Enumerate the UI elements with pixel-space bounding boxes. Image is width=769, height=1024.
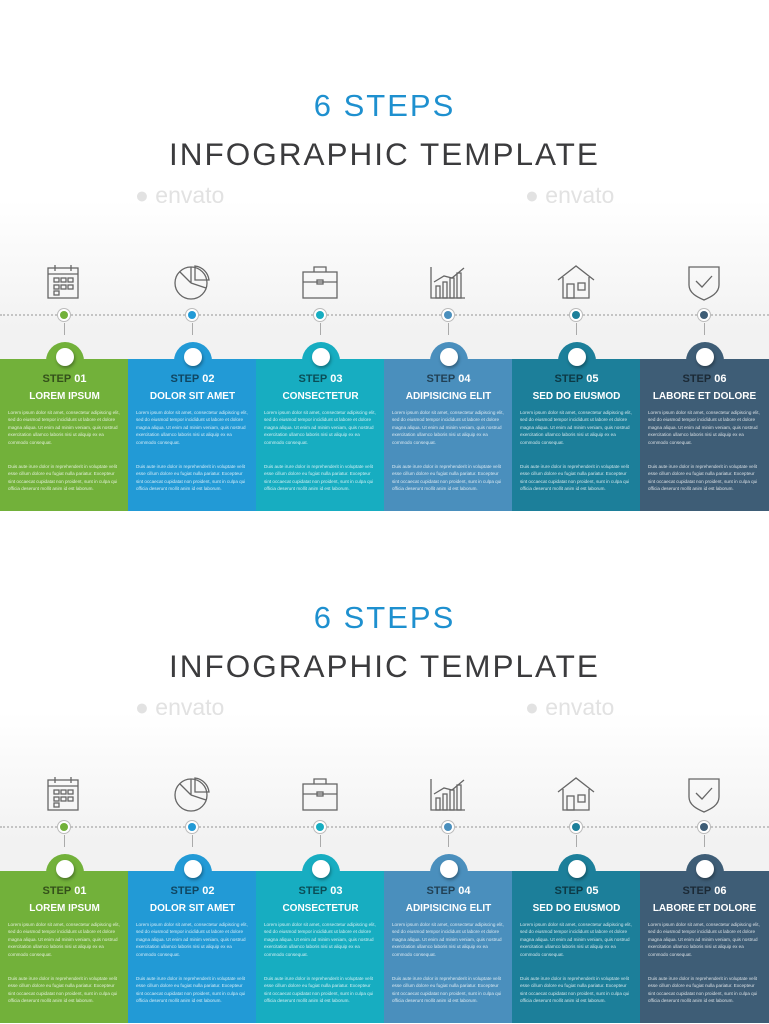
card: step 3: Duis aute irure dolor in reprehenderit in voluptate velit esse cillum dolore eu fugiat nulla pariatur. Excepteur sint occaecat cupidatat non proident, sunt in culpa qui officia deserunt mollit anim id est laborum.	[264, 976, 373, 1003]
card: step 4: STEP 04	[426, 885, 471, 897]
card: step 6: Lorem ipsum dolor sit amet, consectetur adipiscing elit, sed do eiusmod tempor incididunt ut labore et dolore magna aliqua. Ut enim ad minim veniam, quis nostrud exercitation ullamco laboris nisi ut aliquip ex ea commodo consequat.	[648, 922, 760, 957]
card: step 2	[128, 359, 257, 511]
card: step 1: Lorem ipsum dolor sit amet, consectetur adipiscing elit, sed do eiusmod tempor incididunt ut labore et dolore magna aliqua. Ut enim ad minim veniam, quis nostrud exercitation ullamco laboris nisi ut aliquip ex ea commodo consequat.	[8, 410, 120, 445]
watermark right: ● envato	[525, 694, 614, 720]
card: step 3: CONSECTETUR	[282, 903, 359, 914]
card: step 4: STEP 04	[426, 373, 471, 385]
node markers	[57, 308, 711, 335]
title: 6 STEPS	[314, 88, 455, 123]
card: step 5: Duis aute irure dolor in reprehenderit in voluptate velit esse cillum dolore eu fugiat nulla pariatur. Excepteur sint occaecat cupidatat non proident, sunt in culpa qui officia deserunt mollit anim id est laborum.	[520, 976, 629, 1003]
card: step 3: STEP 03	[298, 373, 343, 385]
card: step 3: CONSECTETUR	[282, 391, 359, 402]
card: step 3	[256, 871, 385, 1023]
card: step 2: STEP 02	[170, 885, 215, 897]
node markers	[57, 820, 711, 847]
card: step 1: Duis aute irure dolor in reprehenderit in voluptate velit esse cillum dolore eu fugiat nulla pariatur. Excepteur sint occaecat cupidatat non proident, sunt in culpa qui officia deserunt mollit anim id est laborum.	[8, 976, 117, 1003]
card: step 6: Duis aute irure dolor in reprehenderit in voluptate velit esse cillum dolore eu fugiat nulla pariatur. Excepteur sint occaecat cupidatat non proident, sunt in culpa qui officia deserunt mollit anim id est laborum.	[648, 976, 757, 1003]
card: step 2: Duis aute irure dolor in reprehenderit in voluptate velit esse cillum dolore eu fugiat nulla pariatur. Excepteur sint occaecat cupidatat non proident, sunt in culpa qui officia deserunt mollit anim id est laborum.	[136, 464, 245, 491]
card: step 2: Duis aute irure dolor in reprehenderit in voluptate velit esse cillum dolore eu fugiat nulla pariatur. Excepteur sint occaecat cupidatat non proident, sunt in culpa qui officia deserunt mollit anim id est laborum.	[136, 976, 245, 1003]
card: step 6: LABORE ET DOLORE	[653, 903, 756, 914]
subtitle: INFOGRAPHIC TEMPLATE	[169, 648, 600, 684]
icon: pie chart	[174, 265, 210, 300]
card: step 5: SED DO EIUSMOD	[533, 391, 620, 402]
card: step 4	[384, 359, 513, 511]
icon: briefcase	[302, 266, 338, 299]
icon: shield	[688, 778, 720, 813]
card: step 6: Lorem ipsum dolor sit amet, consectetur adipiscing elit, sed do eiusmod tempor incididunt ut labore et dolore magna aliqua. Ut enim ad minim veniam, quis nostrud exercitation ullamco laboris nisi ut aliquip ex ea commodo consequat.	[648, 410, 760, 445]
card: step 1: Duis aute irure dolor in reprehenderit in voluptate velit esse cillum dolore eu fugiat nulla pariatur. Excepteur sint occaecat cupidatat non proident, sunt in culpa qui officia deserunt mollit anim id est laborum.	[8, 464, 117, 491]
panel: bottom copy	[0, 512, 769, 1024]
card: step 4	[384, 871, 513, 1023]
card: step 4: Duis aute irure dolor in reprehenderit in voluptate velit esse cillum dolore eu fugiat nulla pariatur. Excepteur sint occaecat cupidatat non proident, sunt in culpa qui officia deserunt mollit anim id est laborum.	[392, 976, 501, 1003]
card: step 4: Lorem ipsum dolor sit amet, consectetur adipiscing elit, sed do eiusmod tempor incididunt ut labore et dolore magna aliqua. Ut enim ad minim veniam, quis nostrud exercitation ullamco laboris nisi ut aliquip ex ea commodo consequat.	[392, 410, 504, 445]
icon: pie chart	[174, 777, 210, 812]
card: step 1	[0, 871, 129, 1023]
card: step 3: STEP 03	[298, 885, 343, 897]
card: step 2: Lorem ipsum dolor sit amet, consectetur adipiscing elit, sed do eiusmod tempor incididunt ut labore et dolore magna aliqua. Ut enim ad minim veniam, quis nostrud exercitation ullamco laboris nisi ut aliquip ex ea commodo consequat.	[136, 410, 248, 445]
icon: bar chart	[430, 779, 465, 811]
card: step 3: Lorem ipsum dolor sit amet, consectetur adipiscing elit, sed do eiusmod tempor incididunt ut labore et dolore magna aliqua. Ut enim ad minim veniam, quis nostrud exercitation ullamco laboris nisi ut aliquip ex ea commodo consequat.	[264, 922, 376, 957]
icon: shield	[688, 266, 720, 301]
card: step 2: DOLOR SIT AMET	[150, 903, 235, 914]
card: step 1: STEP 01	[42, 885, 87, 897]
card: step 5: Lorem ipsum dolor sit amet, consectetur adipiscing elit, sed do eiusmod tempor incididunt ut labore et dolore magna aliqua. Ut enim ad minim veniam, quis nostrud exercitation ullamco laboris nisi ut aliquip ex ea commodo consequat.	[520, 410, 632, 445]
card: step 5	[512, 871, 641, 1023]
icon: briefcase	[302, 778, 338, 811]
card: step 6: Duis aute irure dolor in reprehenderit in voluptate velit esse cillum dolore eu fugiat nulla pariatur. Excepteur sint occaecat cupidatat non proident, sunt in culpa qui officia deserunt mollit anim id est laborum.	[648, 464, 757, 491]
card: step 5: Duis aute irure dolor in reprehenderit in voluptate velit esse cillum dolore eu fugiat nulla pariatur. Excepteur sint occaecat cupidatat non proident, sunt in culpa qui officia deserunt mollit anim id est laborum.	[520, 464, 629, 491]
card: step 1: LOREM IPSUM	[29, 391, 100, 402]
card: step 6	[640, 359, 769, 511]
subtitle: INFOGRAPHIC TEMPLATE	[169, 136, 600, 172]
card: step 6: STEP 06	[682, 885, 727, 897]
card: step 1: Lorem ipsum dolor sit amet, consectetur adipiscing elit, sed do eiusmod tempor incididunt ut labore et dolore magna aliqua. Ut enim ad minim veniam, quis nostrud exercitation ullamco laboris nisi ut aliquip ex ea commodo consequat.	[8, 922, 120, 957]
icon: calendar	[47, 265, 79, 299]
card: step 5	[512, 359, 641, 511]
card: step 5: Lorem ipsum dolor sit amet, consectetur adipiscing elit, sed do eiusmod tempor incididunt ut labore et dolore magna aliqua. Ut enim ad minim veniam, quis nostrud exercitation ullamco laboris nisi ut aliquip ex ea commodo consequat.	[520, 922, 632, 957]
card: step 3: Duis aute irure dolor in reprehenderit in voluptate velit esse cillum dolore eu fugiat nulla pariatur. Excepteur sint occaecat cupidatat non proident, sunt in culpa qui officia deserunt mollit anim id est laborum.	[264, 464, 373, 491]
card: step 1: STEP 01	[42, 373, 87, 385]
icon: bar chart	[430, 267, 465, 299]
card: step 6	[640, 871, 769, 1023]
card: step 2: Lorem ipsum dolor sit amet, consectetur adipiscing elit, sed do eiusmod tempor incididunt ut labore et dolore magna aliqua. Ut enim ad minim veniam, quis nostrud exercitation ullamco laboris nisi ut aliquip ex ea commodo consequat.	[136, 922, 248, 957]
icon: calendar	[47, 777, 79, 811]
card: step 3: Lorem ipsum dolor sit amet, consectetur adipiscing elit, sed do eiusmod tempor incididunt ut labore et dolore magna aliqua. Ut enim ad minim veniam, quis nostrud exercitation ullamco laboris nisi ut aliquip ex ea commodo consequat.	[264, 410, 376, 445]
card: step 3	[256, 359, 385, 511]
card: step 2: STEP 02	[170, 373, 215, 385]
card: step 6: LABORE ET DOLORE	[653, 391, 756, 402]
watermark left: ● envato	[135, 182, 224, 208]
panel: top copy	[0, 0, 769, 512]
card: step 2	[128, 871, 257, 1023]
icon: house	[558, 265, 594, 299]
card: step 6: STEP 06	[682, 373, 727, 385]
card: step 4: Duis aute irure dolor in reprehenderit in voluptate velit esse cillum dolore eu fugiat nulla pariatur. Excepteur sint occaecat cupidatat non proident, sunt in culpa qui officia deserunt mollit anim id est laborum.	[392, 464, 501, 491]
card: step 4: Lorem ipsum dolor sit amet, consectetur adipiscing elit, sed do eiusmod tempor incididunt ut labore et dolore magna aliqua. Ut enim ad minim veniam, quis nostrud exercitation ullamco laboris nisi ut aliquip ex ea commodo consequat.	[392, 922, 504, 957]
title: 6 STEPS	[314, 600, 455, 635]
card: step 1: LOREM IPSUM	[29, 903, 100, 914]
card: step 5: SED DO EIUSMOD	[533, 903, 620, 914]
card: step 5: STEP 05	[554, 885, 599, 897]
icon: house	[558, 777, 594, 811]
card: step 1	[0, 359, 129, 511]
card: step 4: ADIPISICING ELIT	[406, 391, 491, 402]
card: step 2: DOLOR SIT AMET	[150, 391, 235, 402]
watermark left: ● envato	[135, 694, 224, 720]
card: step 5: STEP 05	[554, 373, 599, 385]
watermark right: ● envato	[525, 182, 614, 208]
card: step 4: ADIPISICING ELIT	[406, 903, 491, 914]
